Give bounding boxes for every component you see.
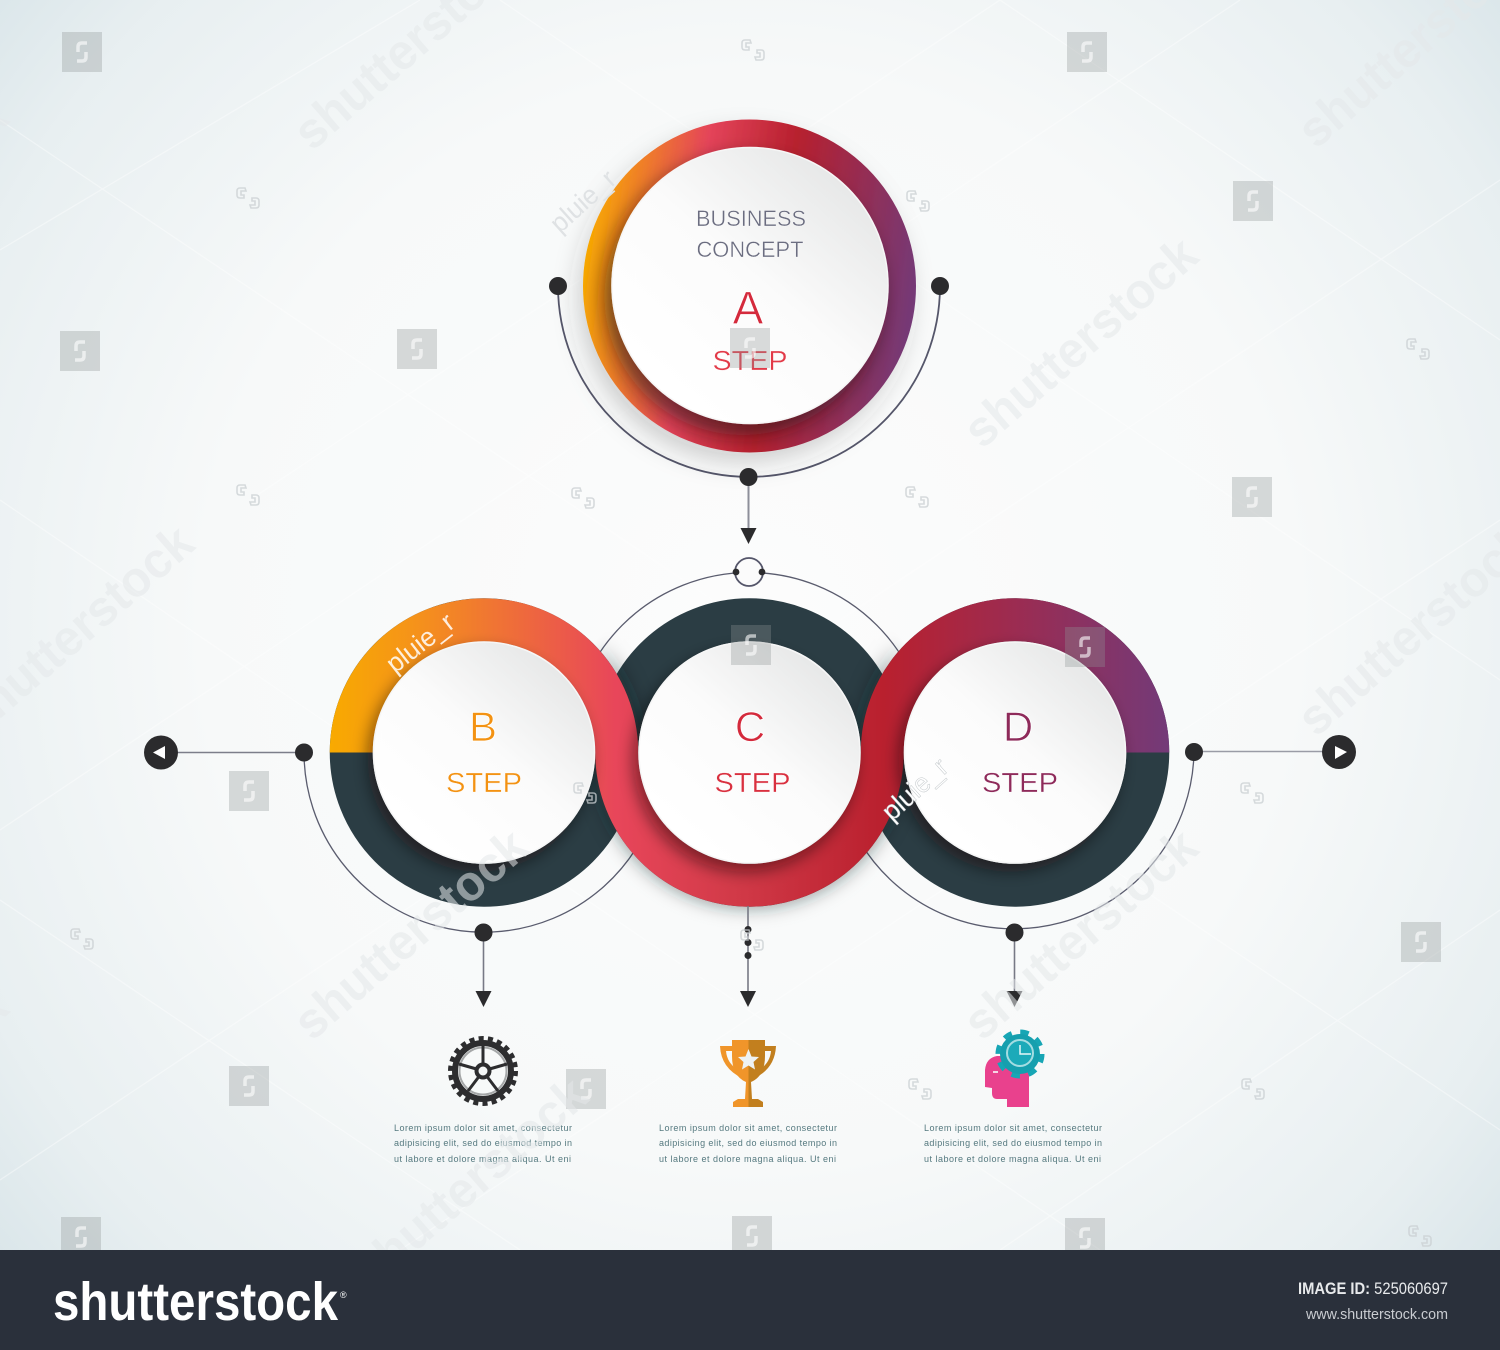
footer logo: shutterstock bbox=[53, 1272, 339, 1332]
thin connector arcs bbox=[304, 573, 1194, 932]
step B label: STEP bbox=[446, 767, 522, 798]
watermark author tags bbox=[380, 164, 954, 826]
panel: step C disc bbox=[639, 642, 860, 863]
step A arc connector bbox=[558, 286, 940, 477]
watermark author tags: pluie_r bbox=[544, 164, 622, 238]
letter D: D bbox=[1003, 703, 1033, 750]
node right bbox=[931, 277, 949, 295]
heading line two: CONCEPT bbox=[696, 237, 804, 262]
panel: step A ring bbox=[549, 134, 949, 477]
image id: IMAGE ID: 525060697 bbox=[1298, 1279, 1448, 1298]
panel: step B disc bbox=[374, 642, 594, 863]
letter A: A bbox=[733, 282, 764, 334]
text block: step D description: Lorem ipsum dolor sit amet, consectetur bbox=[924, 1123, 1102, 1133]
left arrow connector bbox=[144, 736, 313, 770]
text block: step B description: Lorem ipsum dolor sit amet, consectetur bbox=[394, 1123, 572, 1133]
step A colored ring bbox=[598, 134, 902, 438]
icon: gear wheel bbox=[451, 1039, 515, 1103]
registered mark: ® bbox=[340, 1290, 347, 1300]
watermark wordmarks: shutterstock bbox=[342, 1066, 598, 1298]
icon: trophy bbox=[720, 1040, 776, 1107]
letter B: B bbox=[469, 703, 497, 750]
text block: step C description: ut labore et dolore magna aliqua. Ut eni bbox=[659, 1154, 836, 1164]
step C label: STEP bbox=[714, 767, 790, 798]
watermark author tags: pluie_r bbox=[380, 607, 460, 679]
heading: business concept: BUSINESS bbox=[696, 206, 806, 231]
watermark author tags: pluie_r bbox=[876, 752, 954, 826]
text block: step D description: adipisicing elit, sed do eiusmod tempo in bbox=[924, 1138, 1102, 1148]
ribbon crossing shadow bbox=[592, 644, 906, 920]
text block: step B description: ut labore et dolore magna aliqua. Ut eni bbox=[394, 1154, 571, 1164]
text block: step C description: Lorem ipsum dolor sit amet, consectetur bbox=[659, 1123, 837, 1133]
panel: woven colored ribbon bbox=[351, 620, 1148, 885]
watermark wordmarks: shutterstock bbox=[282, 818, 538, 1050]
panel: dark ring halves bbox=[351, 620, 1148, 885]
text block: step D description: ut labore et dolore magna aliqua. Ut eni bbox=[924, 1154, 1101, 1164]
text block: step C description: adipisicing elit, sed do eiusmod tempo in bbox=[659, 1138, 837, 1148]
text block: step C description bbox=[659, 1123, 837, 1164]
watermark wordmarks: shutterstock bbox=[952, 226, 1208, 458]
arrow: B down bbox=[474, 924, 492, 1007]
icon: head with clock gear bbox=[985, 1032, 1042, 1107]
text block: step B description bbox=[394, 1123, 572, 1164]
right arrow connector bbox=[1185, 735, 1356, 769]
arrow: D down bbox=[1006, 924, 1024, 1007]
letter C: C bbox=[735, 703, 765, 750]
connector ring above C bbox=[733, 558, 765, 586]
text block: step B description: adipisicing elit, sed do eiusmod tempo in bbox=[394, 1138, 572, 1148]
step D label: STEP bbox=[982, 767, 1058, 798]
step A label: STEP bbox=[712, 345, 788, 376]
watermark wordmarks: shutterstock bbox=[952, 818, 1208, 1050]
panel: step D disc bbox=[904, 642, 1126, 863]
node left bbox=[549, 277, 567, 295]
footer bar bbox=[0, 1250, 1500, 1350]
site url: www.shutterstock.com bbox=[1305, 1306, 1448, 1323]
step A disc bbox=[612, 148, 888, 424]
arrow: A to C bbox=[740, 468, 758, 544]
text block: step D description bbox=[924, 1123, 1102, 1164]
arrow: C down bbox=[740, 906, 756, 1007]
